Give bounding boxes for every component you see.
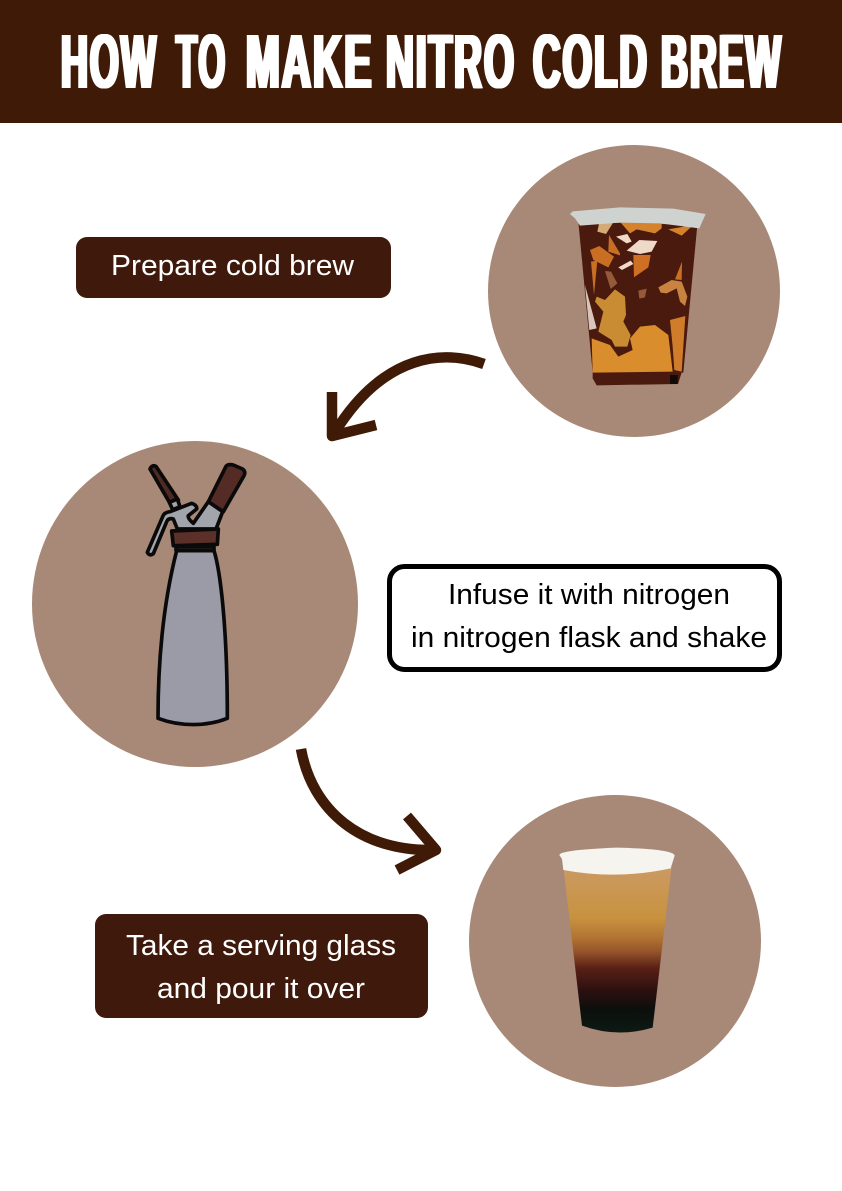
- step 1 label: Prepare cold brew: [111, 250, 354, 282]
- flask body: [158, 551, 227, 725]
- step 1 label: [76, 237, 391, 298]
- title: BREW: [661, 19, 783, 105]
- title banner: [0, 0, 842, 123]
- title: MAKE: [246, 19, 373, 105]
- step 3 label: [95, 914, 428, 1018]
- step 1 circle: [488, 145, 780, 437]
- step 2 label: Infuse it with nitrogen: [448, 579, 730, 611]
- arrow: step 2 to step 3: [301, 749, 436, 870]
- icon: nitro cold brew glass: [559, 848, 675, 1033]
- step 3 label: and pour it over: [157, 973, 366, 1005]
- arrow: step 1 to step 2: [332, 357, 484, 436]
- flask head: [147, 465, 245, 555]
- step 2 label: [390, 566, 780, 670]
- title: NITRO: [386, 19, 516, 105]
- title: [61, 19, 783, 105]
- step 2 label: in nitrogen flask and shake: [411, 622, 767, 654]
- title: HOW: [61, 19, 158, 105]
- title: TO: [176, 19, 227, 105]
- step 2 circle: [32, 441, 358, 767]
- step 3 circle: [469, 795, 761, 1087]
- icon: iced cold brew cup: [570, 207, 706, 385]
- icon: nitrogen flask: [147, 465, 245, 725]
- title: COLD: [533, 19, 649, 105]
- step 3 label: Take a serving glass: [126, 930, 396, 962]
